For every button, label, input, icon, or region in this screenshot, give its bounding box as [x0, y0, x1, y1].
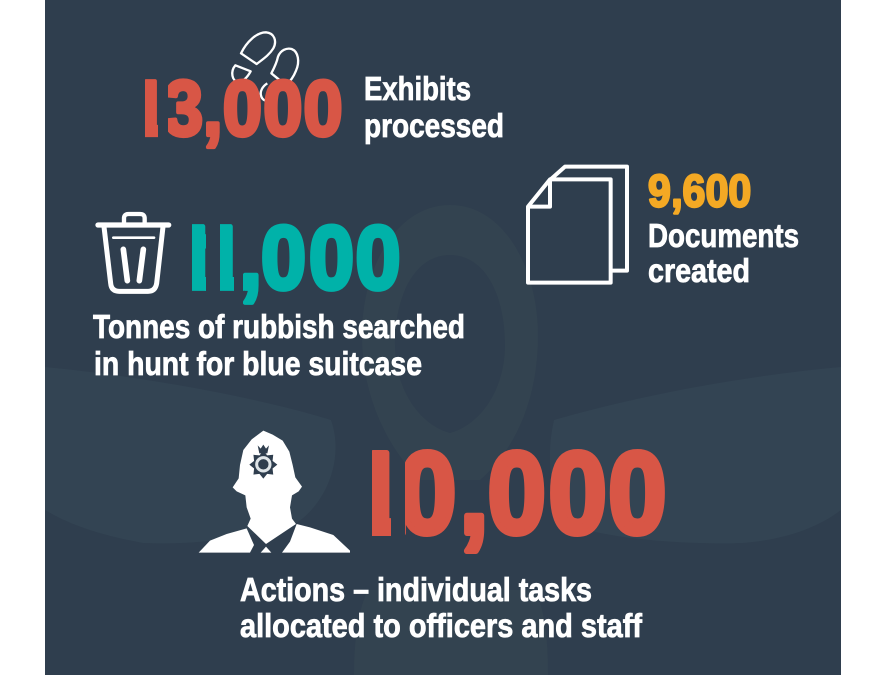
label: documents created [648, 217, 799, 289]
label: documents created: created [648, 252, 750, 289]
label: actions: Actions – individual tasks [240, 571, 592, 608]
stat: 9,600: 9,600 [648, 166, 751, 217]
icon: footprints [232, 32, 298, 101]
icon: rubbish bin [98, 214, 169, 291]
stat: 11,000: 11,000 [173, 208, 401, 309]
label: exhibits processed: Exhibits [364, 70, 471, 107]
label: exhibits processed [364, 70, 504, 144]
icon: police officer [199, 431, 350, 553]
label: actions: allocated to officers and staff [240, 607, 643, 644]
label: tonnes of rubbish: Tonnes of rubbish searched [93, 308, 465, 345]
stat: 13,000: 13,000 [129, 65, 343, 152]
label: actions [240, 571, 643, 644]
stat: 10,000: 10,000 [348, 429, 666, 558]
label: tonnes of rubbish: in hunt for blue suitcase [94, 345, 422, 382]
label: documents created: Documents [648, 217, 799, 254]
label: tonnes of rubbish [93, 308, 465, 382]
watermark crest [45, 205, 841, 675]
icon: documents [528, 167, 627, 283]
label: exhibits processed: processed [364, 107, 504, 144]
